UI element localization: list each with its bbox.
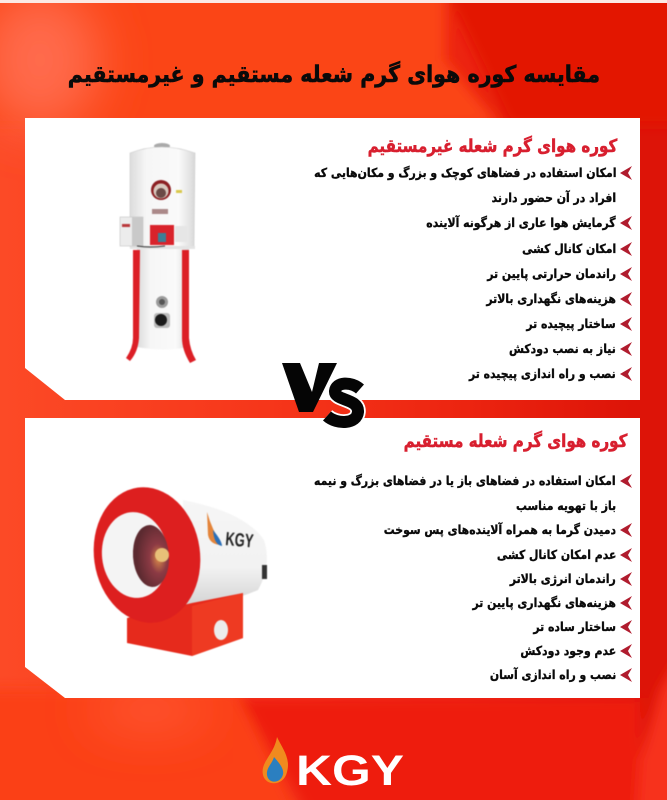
item: گرمایش هوا عاری از هرگونه آلاینده bbox=[427, 215, 616, 230]
list: indirect features bbox=[314, 165, 632, 382]
item: امکان استفاده در فضاهای کوچک و بزرگ و مکان‌هایی که bbox=[314, 165, 616, 180]
item: دمیدن گرما به همراه آلاینده‌های پس سوخت bbox=[384, 522, 616, 537]
item continuation: باز با تهویه مناسب bbox=[516, 498, 616, 513]
item: امکان استفاده در فضاهای باز یا در فضاهای بزرگ و نیمه bbox=[315, 473, 616, 488]
VS badge bbox=[282, 363, 366, 428]
illustration: horizontal direct heater: KGY bbox=[225, 529, 254, 552]
icon: flame bbox=[263, 737, 288, 783]
item: هزینه‌های نگهداری پایین تر bbox=[472, 595, 616, 610]
item: عدم وجود دودکش bbox=[520, 643, 616, 658]
item: امکان کانال کشی bbox=[522, 241, 616, 256]
item: هزینه‌های نگهداری بالاتر bbox=[486, 291, 616, 306]
item: راندمان حرارتی پایین تر bbox=[487, 266, 616, 281]
illustration: vertical indirect heater bbox=[119, 142, 196, 364]
panel: indirect flame heater bbox=[25, 118, 640, 400]
illustration: horizontal direct heater bbox=[92, 486, 268, 657]
item: راندمان انرژی بالاتر bbox=[510, 571, 616, 586]
item: نصب و راه اندازی آسان bbox=[490, 667, 616, 682]
heading: indirect: کوره هوای گرم شعله غیرمستقیم bbox=[367, 136, 617, 157]
item: نیاز به نصب دودکش bbox=[509, 341, 616, 356]
item: ساختار ساده تر bbox=[533, 619, 616, 634]
title: مقایسه کوره هوای گرم شعله مستقیم و غیرمستقیم bbox=[68, 62, 600, 88]
item continuation: افراد در آن حضور دارند bbox=[492, 190, 616, 205]
panel: direct flame heater bbox=[25, 418, 640, 698]
item: نصب و راه اندازی پیچیده تر bbox=[469, 366, 616, 381]
item: ساختار پیچیده تر bbox=[527, 316, 616, 331]
heading: direct: کوره هوای گرم شعله مستقیم bbox=[403, 431, 627, 452]
logo: KGY bbox=[262, 737, 404, 788]
item: عدم امکان کانال کشی bbox=[496, 547, 616, 562]
